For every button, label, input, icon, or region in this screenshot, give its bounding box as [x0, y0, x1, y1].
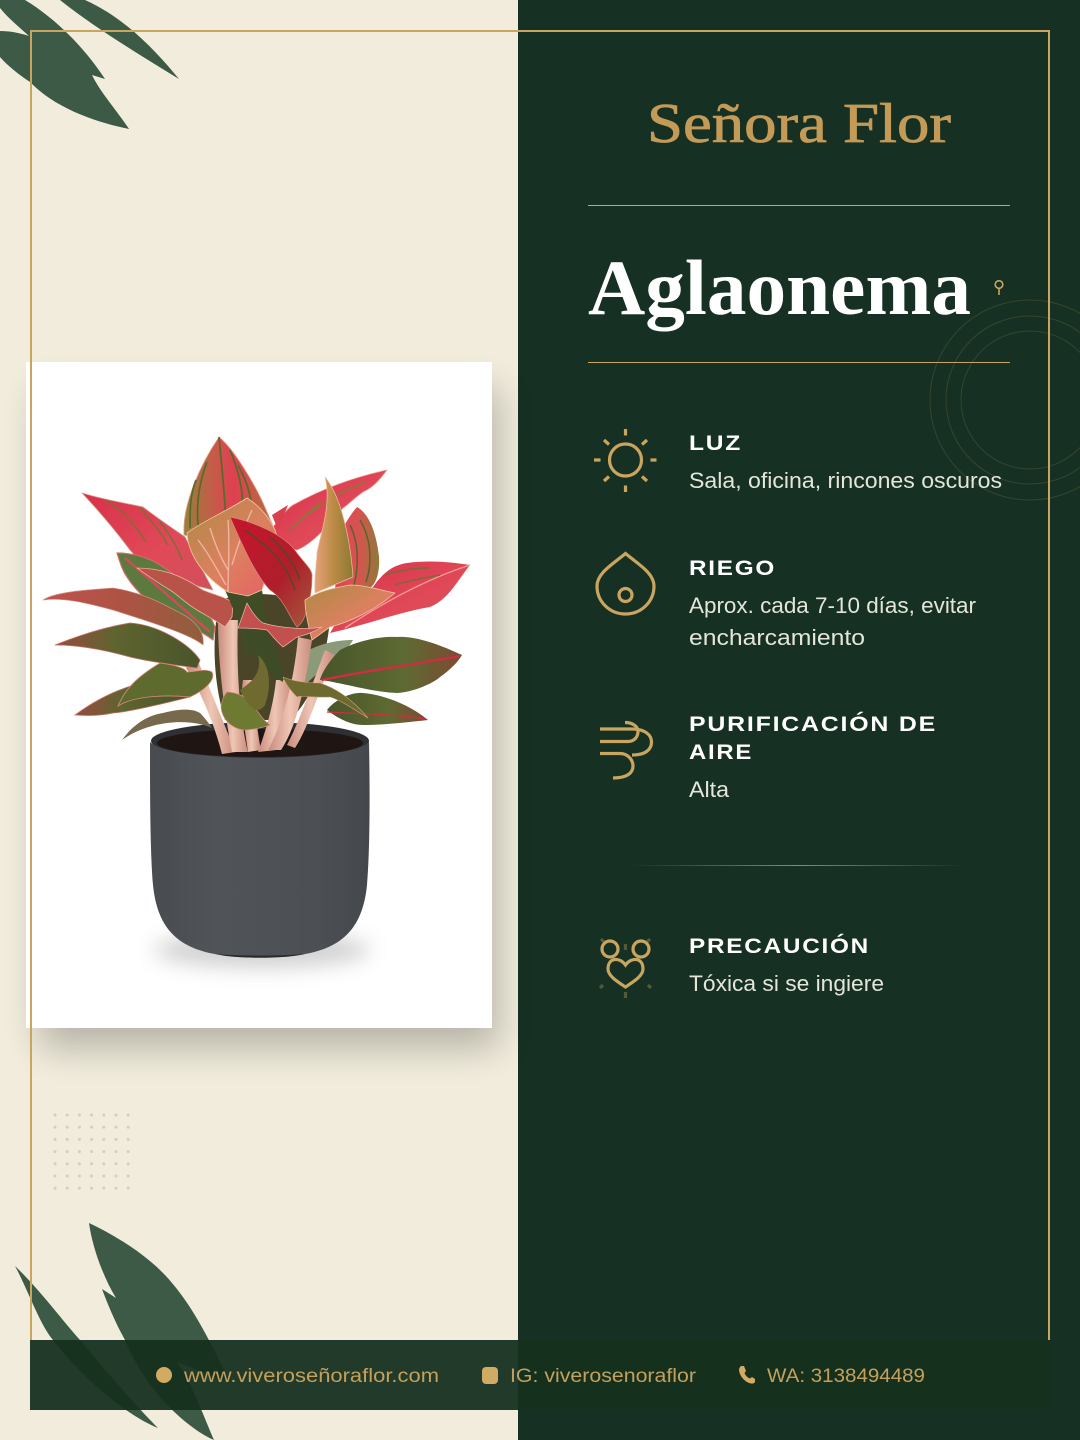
icon: sun [594, 429, 656, 492]
plant pot [150, 722, 370, 958]
divider [630, 865, 965, 866]
footer: instagram: IG: viverosenoraflor [510, 1366, 697, 1387]
text: light: Sala, oficina, rincones oscuros [689, 468, 1002, 493]
label: air purification: PURIFICACIÓN DE [689, 712, 937, 736]
footer: whatsapp: WA: 3138494489 [767, 1366, 925, 1387]
icon: water drop [597, 554, 654, 614]
text: watering: Aprox. cada 7-10 días, evitar [689, 593, 977, 618]
footer: website: www.viveroseñoraflor.com [183, 1366, 439, 1387]
text: caution: Tóxica si se ingiere [689, 971, 884, 996]
brand title: Señora Flor [647, 93, 951, 155]
decorative concentric circles [930, 300, 1080, 500]
icon: phone [739, 1366, 755, 1384]
background: dark green right panel [518, 0, 1080, 1440]
text: air purification: Alta [689, 777, 729, 802]
rule under brand [588, 205, 1010, 206]
leaves: top-left corner [0, 0, 179, 129]
footer bar [30, 1340, 1050, 1410]
pot ground shadow [154, 932, 370, 968]
plant foliage: front leaves [137, 477, 395, 730]
plant foliage: back leaves [43, 437, 470, 720]
section: air purification [600, 712, 937, 802]
far left leaf [43, 588, 203, 645]
label: RIEGO: RIEGO [689, 557, 776, 580]
section: watering [597, 554, 977, 650]
label: air purification: AIRE [689, 741, 753, 764]
pale back leaf [295, 640, 353, 685]
plant stems [186, 620, 335, 754]
label: PRECAUCIÓN: PRECAUCIÓN [689, 934, 870, 958]
photo card shadow [40, 388, 498, 1048]
rule under plant name [588, 362, 1010, 363]
icon: wind [600, 722, 652, 778]
plant foliage: lower dark leaves [55, 623, 462, 740]
background: cream left panel [0, 0, 518, 1440]
icon: small pin mark [995, 281, 1003, 295]
icon: instagram square [482, 1367, 498, 1384]
section: light [594, 429, 1002, 493]
green-striped mid leaf [117, 553, 215, 640]
plant name heading: Aglaonema [588, 244, 971, 331]
decorative dot grid [53, 1113, 133, 1193]
icon: heart with circles [600, 939, 651, 998]
text: watering: encharcamiento [689, 625, 865, 650]
panel: plant photo [26, 362, 492, 1028]
icon: web dot [156, 1367, 172, 1383]
section: caution [600, 934, 884, 998]
label: LUZ: LUZ [689, 432, 742, 455]
leaves: bottom-left corner [15, 1223, 230, 1440]
